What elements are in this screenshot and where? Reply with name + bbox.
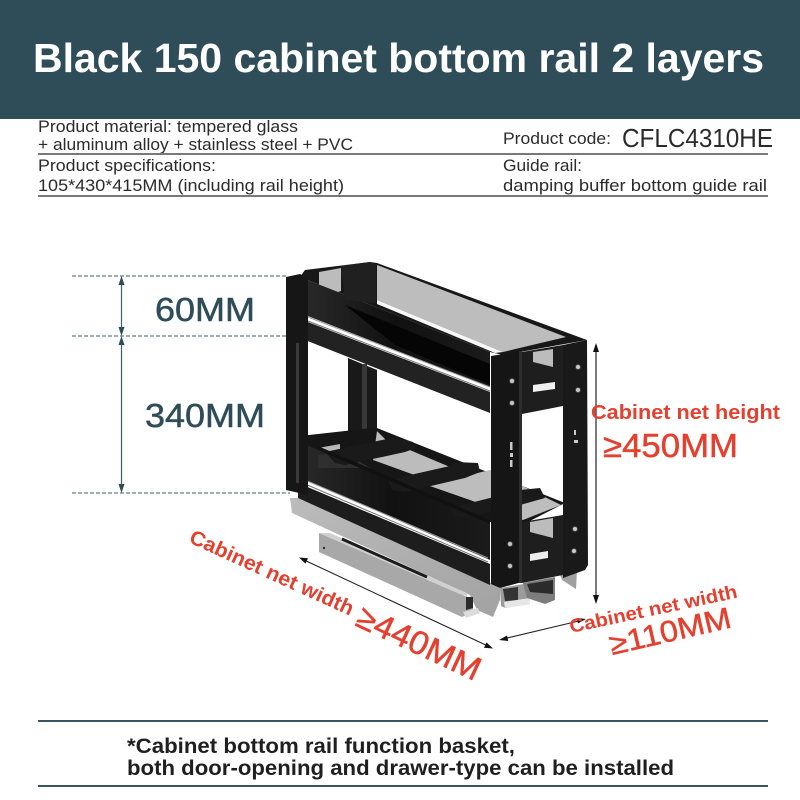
product specification table: damping buffer bottom guide rail bbox=[503, 176, 767, 195]
upper front beam bbox=[300, 319, 490, 413]
product specification table: Product code: bbox=[503, 129, 611, 148]
header banner bbox=[0, 0, 800, 119]
label: at least 110MM: ≥110MM bbox=[606, 602, 734, 662]
clip bars bbox=[318, 437, 545, 522]
note line 2: both door-opening and drawer-type can be installed bbox=[127, 757, 674, 780]
label: Cabinet net width: Cabinet net width bbox=[568, 582, 739, 638]
upper right connector bbox=[522, 345, 563, 414]
rear left post bbox=[348, 358, 377, 432]
lower rear glass panel bbox=[296, 428, 565, 525]
rear top corner bbox=[341, 262, 376, 303]
red dimension: cabinet net height bbox=[591, 343, 780, 604]
label: Cabinet net height: Cabinet net height bbox=[591, 401, 780, 424]
bottom rail end profiles bbox=[500, 570, 577, 608]
lower guide rail bbox=[319, 533, 480, 618]
product specification table: 105*430*415MM (including rail height) bbox=[38, 176, 344, 195]
right rear post bbox=[563, 340, 588, 578]
label: Cabinet net width: Cabinet net width bbox=[186, 526, 357, 620]
product specification table: Product material: tempered glass bbox=[38, 117, 298, 136]
lower right connector bbox=[522, 515, 563, 583]
note line 1: *Cabinet bottom rail function basket, bbox=[127, 735, 515, 758]
title: Black 150 cabinet bottom rail 2 layers bbox=[33, 35, 764, 81]
silver base rail bbox=[290, 498, 500, 617]
depth arrow: cabinet net width 440 bbox=[186, 526, 493, 688]
right front post bbox=[491, 351, 522, 588]
left post bbox=[286, 274, 308, 495]
mounting holes bbox=[508, 364, 580, 568]
product specification table: Product specifications: bbox=[38, 156, 216, 175]
label: 60MM: 60MM bbox=[155, 291, 255, 328]
product illustration: two-layer basket bbox=[286, 262, 588, 618]
upper basket tray bbox=[300, 277, 490, 387]
label: at least 450MM: ≥450MM bbox=[603, 427, 738, 464]
product specification table bbox=[38, 117, 773, 197]
label: at least 440MM: ≥440MM bbox=[351, 598, 487, 688]
product specification table: Guide rail: bbox=[503, 156, 582, 175]
footer note bbox=[38, 720, 768, 787]
height dimension guides bbox=[72, 276, 290, 493]
lower front beam bbox=[298, 483, 490, 585]
product specification table: + aluminum alloy + stainless steel + PVC bbox=[38, 135, 353, 154]
width arrow: cabinet net width 110 bbox=[499, 582, 739, 662]
label: 340MM: 340MM bbox=[145, 397, 265, 434]
lower basket tray bbox=[297, 441, 490, 560]
upper rear glass panel bbox=[300, 262, 587, 355]
product specification table: CFLC4310HE bbox=[622, 123, 773, 153]
